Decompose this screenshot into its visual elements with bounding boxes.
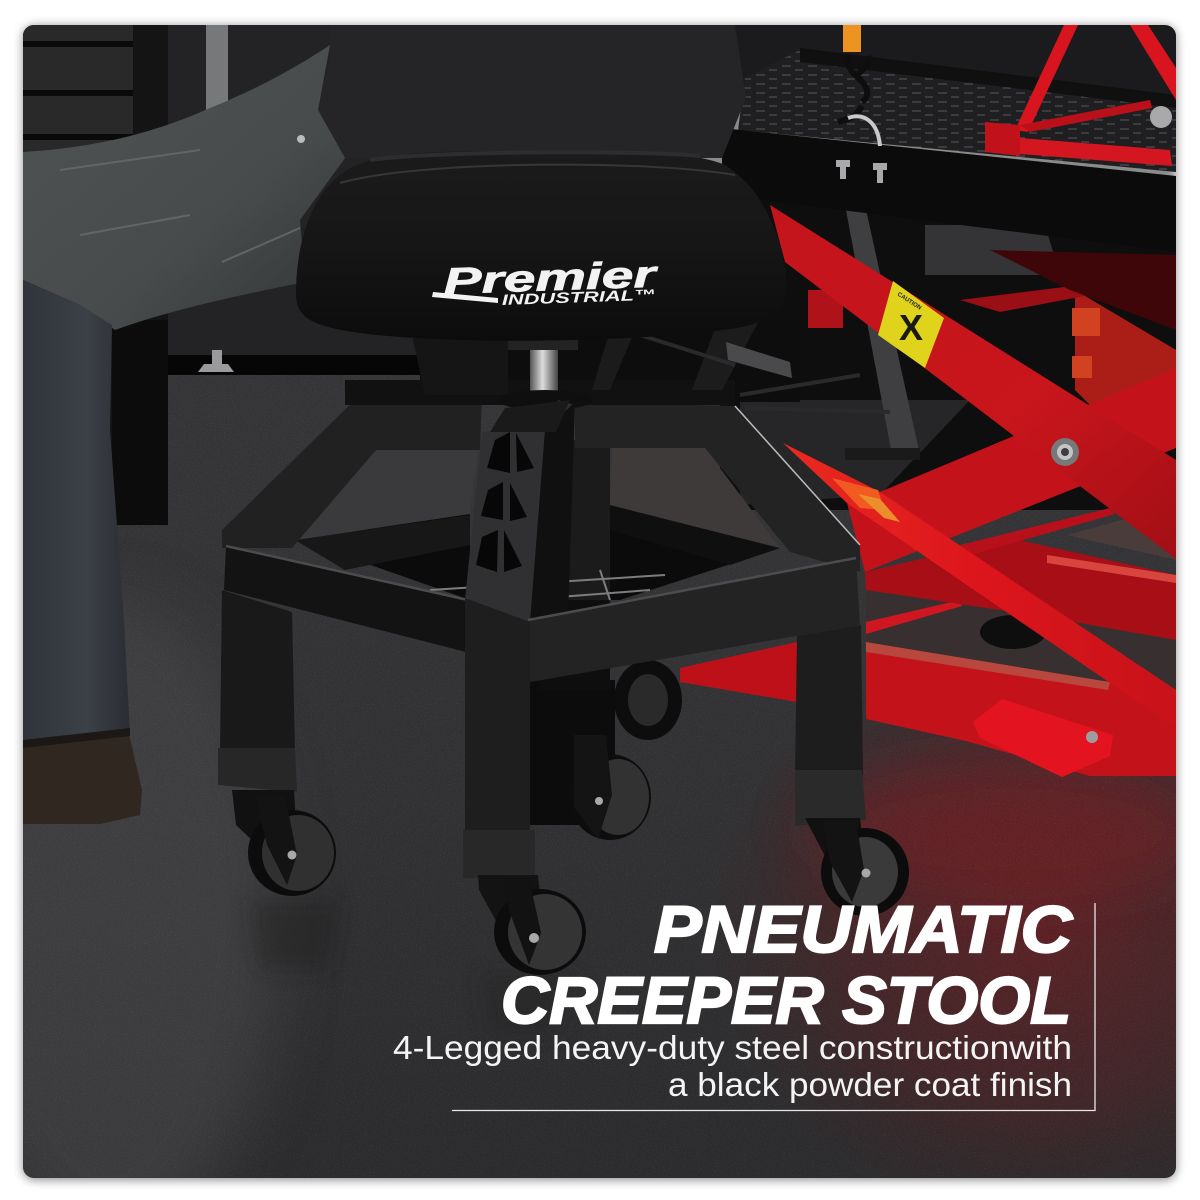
column and tray — [295, 440, 780, 690]
garage floor — [0, 370, 1200, 1200]
person — [23, 25, 746, 824]
left front caster — [232, 790, 336, 896]
shirt — [423, 25, 746, 158]
left leg — [218, 590, 297, 792]
padded seat — [296, 151, 787, 341]
rear casters — [530, 660, 682, 840]
seat logo: Premier — [443, 253, 660, 302]
under-seat bracket — [412, 338, 420, 370]
trousers thigh — [23, 45, 345, 330]
table bolts — [836, 160, 887, 183]
gas column — [504, 340, 586, 408]
front leg — [463, 598, 535, 878]
bright diagonal arm — [783, 443, 1176, 728]
subheading: a black powder coat finish — [668, 1066, 1072, 1103]
subheading — [393, 1029, 1072, 1103]
lift base — [680, 642, 797, 702]
rear red arm — [960, 285, 1085, 312]
upper frame arms — [222, 380, 860, 572]
background under the lift — [720, 190, 1176, 510]
garage wall and cabinets — [23, 25, 420, 525]
foot pedal — [973, 699, 1113, 777]
seat logo — [432, 253, 660, 309]
shoe — [23, 730, 142, 824]
heading: PNEUMATIC — [654, 892, 1073, 966]
inner bars — [865, 538, 1176, 640]
subheading: 4-Legged heavy-duty steel constructionwith — [393, 1029, 1072, 1066]
creeper stool — [218, 151, 909, 975]
lift caster wheel — [980, 615, 1046, 649]
thin lower rod — [866, 600, 962, 634]
floor gap behind the base — [866, 590, 1176, 688]
corner bracket line — [452, 903, 1095, 1110]
right front caster — [805, 818, 909, 916]
seat logo: INDUSTRIAL™ — [502, 287, 656, 309]
heading: CREEPER STOOL — [501, 963, 1071, 1037]
red lift upper frame — [985, 25, 1176, 166]
dark backdrop behind seat column — [420, 331, 800, 402]
rear ram housing — [1075, 290, 1176, 410]
right leg — [795, 625, 866, 826]
seat lever and arms — [592, 315, 890, 412]
centre front caster — [478, 875, 586, 975]
red scissor lift — [680, 205, 1176, 777]
pivot bolt — [1051, 438, 1079, 466]
heading — [501, 892, 1073, 1037]
band from lower left to right — [847, 368, 1176, 572]
view through frame right — [610, 448, 780, 548]
view through frame left — [296, 450, 478, 540]
title block — [393, 892, 1095, 1110]
band from upper left to lower right — [770, 205, 1176, 559]
floor reflections — [251, 898, 556, 1028]
orange strap and S hook — [838, 25, 880, 146]
front rails — [224, 546, 860, 682]
trousers lower leg — [23, 280, 130, 742]
caution sticker: CAUTION — [896, 292, 922, 312]
front post with triangular cut-outs — [465, 400, 575, 622]
lift table — [722, 25, 1176, 252]
gap behind inner bars — [1068, 520, 1176, 560]
caution sticker: X — [899, 307, 923, 348]
caution sticker — [878, 281, 944, 368]
